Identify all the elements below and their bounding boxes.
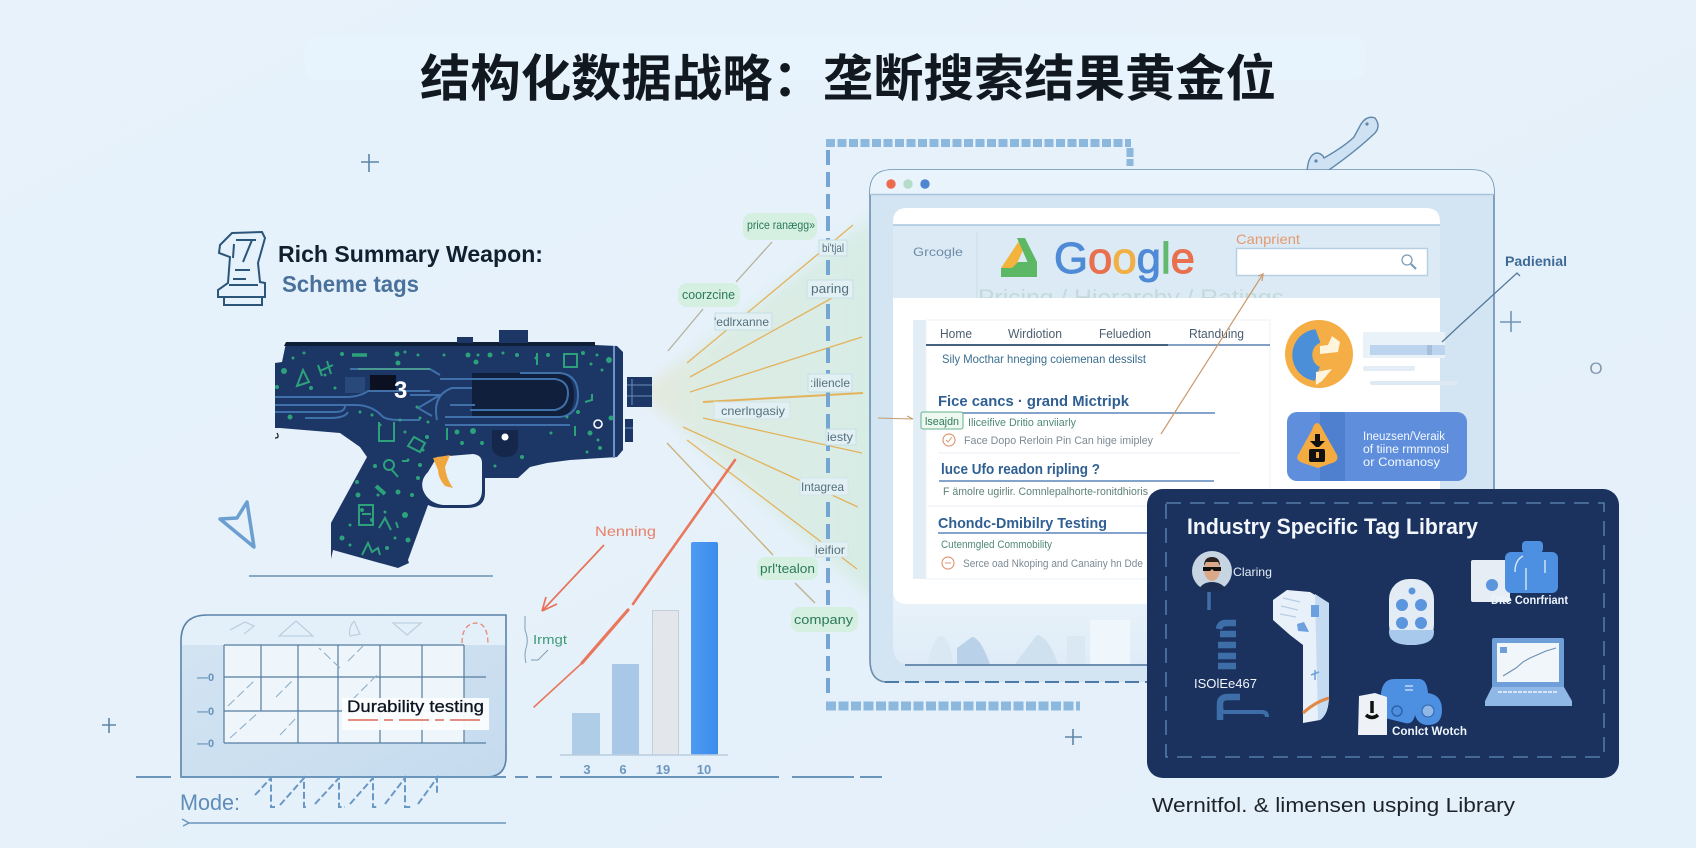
circuit lines (275, 346, 614, 458)
result 1 heading: Fice cancs · grand Mictripk (938, 394, 1130, 410)
label: irmgt with bracket (525, 616, 567, 663)
label: prl'tealon (757, 557, 818, 580)
panel body (181, 615, 506, 777)
dashed data frame (826, 143, 1131, 706)
label: paring (807, 280, 853, 298)
green schema dots (275, 350, 614, 550)
gun body (275, 343, 623, 568)
small google label: Grcogle (913, 245, 963, 259)
table nav: Rtanduing (1189, 327, 1244, 341)
faint mountains (927, 636, 953, 664)
warning text: of tiine rmmnosl (1363, 444, 1449, 456)
green glow cone from muzzle (640, 215, 885, 610)
durability testing label: Durability testing (347, 697, 484, 716)
icon: warning triangle with lock (1297, 423, 1337, 468)
label: company (791, 607, 858, 632)
browser window (870, 170, 1494, 682)
date constraint icon (1471, 541, 1558, 602)
label: edixanne: 'edlrxanne (714, 315, 769, 329)
label: price range (743, 213, 817, 240)
labels on rays (678, 213, 858, 632)
label: iliencle: :iliencle (810, 376, 850, 390)
panel: industry specific tag library (1147, 489, 1619, 778)
search label: Canprient (1236, 231, 1300, 247)
warning text: Ineuzsen/Veraik (1363, 431, 1445, 443)
browser frame outline (870, 170, 1494, 682)
result 2 heading: luce Ufo readon ripling ? (941, 461, 1100, 478)
label: coordine (678, 283, 740, 307)
label: irmgt with bracket: Irmgt (533, 632, 567, 647)
library caption: Wernitfol. & limensen usping Library (1152, 795, 1515, 817)
title: 结构化数据战略：垄断搜索结果黄金位 (420, 39, 1276, 111)
label: coordine: coorzcine (682, 287, 735, 302)
highlight line (358, 368, 430, 370)
sight blocks (457, 330, 528, 343)
warning text (1363, 431, 1449, 469)
chart labels: 19 (656, 762, 670, 777)
title backdrop (305, 36, 1365, 80)
axis ticks (197, 672, 214, 750)
result 3 green subtext: Cutenmgled Commobility (941, 539, 1052, 551)
label: cnerlngasiy (714, 402, 790, 419)
remote icon (1389, 579, 1434, 645)
gun top rail (284, 342, 595, 346)
label: prl'tealon: prl'tealon (760, 561, 815, 576)
google wordmark: Google (1054, 234, 1195, 283)
decorative ring: O (1589, 359, 1603, 378)
padienial pointer line (1442, 273, 1520, 342)
heading line 1: Rich Summary Weapon: (278, 241, 543, 267)
avatar (1192, 551, 1232, 591)
table panel (926, 320, 1270, 579)
green highlight tag (921, 412, 963, 429)
mode arrow line (182, 819, 506, 826)
axis ticks: —0 (197, 672, 214, 684)
warning text: or Comanosy (1363, 457, 1440, 469)
icon: wrench behind browser (1307, 117, 1378, 172)
label: nenning: Nenning (595, 523, 656, 539)
bar 4 (691, 542, 718, 755)
warning panel (1287, 412, 1467, 481)
search page card (893, 208, 1440, 604)
green schema glyph shapes (297, 353, 592, 555)
table nav: Wirdiotion (1008, 327, 1062, 341)
mode row (180, 778, 506, 826)
heading line 2: Scheme tags (282, 271, 419, 297)
bar chart (560, 542, 728, 777)
dark slide (472, 373, 574, 417)
red dashed badge (462, 623, 488, 645)
label: bital: bi'tjal (822, 241, 844, 255)
mode label: Mode: (180, 790, 240, 815)
result 3 text: Serce oad Nkoping and Canainy hn Dde (963, 558, 1143, 570)
contact watch label: Conlct Wotch (1392, 724, 1467, 738)
label: price range: price ranægg» (747, 218, 815, 232)
decorative plus marks (102, 154, 1521, 745)
date constraint label: Dlte Conrfriant (1491, 593, 1568, 607)
panel background (1147, 489, 1619, 778)
bar 1 (572, 713, 600, 755)
arrow to green tag (878, 416, 913, 419)
bar 2 (612, 664, 639, 755)
search box (1236, 248, 1428, 276)
result 2 text: F ämolre ugirlir. Comnlepalhorte-ronitdhioris (943, 486, 1148, 498)
frame left line (826, 150, 830, 698)
zigzag arrows (255, 778, 437, 807)
green highlight tag: lseajdn (925, 416, 959, 428)
browser frame (870, 170, 1494, 682)
result table (913, 320, 1270, 579)
chart labels: 3 (583, 762, 591, 777)
baseline under table and chart (136, 776, 882, 778)
heading: rich summary weapon (278, 241, 543, 297)
white numeral on gun: 3 (394, 377, 407, 404)
result 1 text: Face Dopo Rerloin Pin Can hige imipley (964, 435, 1153, 447)
table sub nav: Sily Mocthar hneging coiemenan dessilst (942, 352, 1147, 366)
panel outline (181, 615, 506, 777)
window buttons (886, 179, 930, 189)
label: iesty: iesty (827, 430, 853, 444)
icon: rich summary weapon outline (218, 232, 265, 305)
grid (224, 645, 486, 743)
knowledge bars (1363, 332, 1458, 385)
iso label: ISOlEe467 (1194, 676, 1257, 691)
browser bottom dashed edge (885, 681, 1150, 683)
grip outline detail (275, 433, 278, 438)
label: company: company (794, 612, 854, 627)
panel header (181, 615, 506, 645)
result 3 heading: Chondc-Dmibilry Testing (938, 515, 1107, 532)
contact watch icon (1358, 679, 1442, 735)
axis ticks: —0 (197, 738, 214, 750)
label: intagrea: Intagrea (801, 480, 844, 494)
handheld scanner icon (1273, 590, 1329, 723)
chart labels: 10 (697, 762, 711, 777)
muzzle blocks (625, 377, 652, 442)
label: padienial: Padienial (1505, 253, 1567, 269)
arrow: nenning to table (542, 545, 604, 611)
comb icon (1218, 623, 1267, 720)
avatar label: Claring (1233, 565, 1272, 579)
lower page area (893, 590, 1440, 665)
browser title bar (870, 170, 1494, 194)
trigger guard opening (422, 454, 482, 505)
laptop icon (1485, 638, 1572, 706)
chart labels: 6 (619, 762, 627, 777)
frame bottom band (826, 702, 1080, 710)
chart labels (583, 762, 711, 777)
table nav: Home (940, 327, 972, 341)
label: cnerlngasiy: cnerlngasiy (721, 404, 785, 418)
durability table panel (181, 615, 506, 777)
page header band (893, 225, 1440, 298)
icon: paper arrow (220, 502, 254, 547)
label: paring: paring (811, 281, 849, 296)
label: ieifior: ieifior (815, 543, 845, 557)
table left strip (913, 320, 926, 579)
grid dashes (228, 646, 378, 738)
thick orange trend line (534, 460, 735, 707)
arrow to search box (1161, 274, 1263, 434)
header icons (230, 621, 421, 636)
gun base line (249, 575, 493, 577)
axis ticks: —0 (197, 706, 214, 718)
panel title: Industry Specific Tag Library (1187, 514, 1479, 539)
frame top band (826, 139, 1131, 147)
screw recess (492, 430, 518, 457)
durability testing label (342, 697, 489, 730)
dashed border (1166, 503, 1604, 757)
table nav (940, 327, 1244, 341)
trigger (433, 455, 453, 488)
chart axis (560, 754, 728, 756)
bar 3 (652, 610, 678, 755)
ray lines from muzzle (667, 225, 863, 603)
faint clipped header text: Pricing / Hierarchy / Ratings (978, 285, 1284, 310)
icon: magnifier (1402, 255, 1416, 269)
schema gun illustration (275, 330, 652, 568)
icon: tricolor logo triangle (1001, 238, 1037, 277)
result 1 green subtext: Iliceifive Dritio anviiarly (968, 417, 1076, 429)
icon: orange knowledge badge (1285, 320, 1353, 388)
table nav: Feluedion (1099, 327, 1151, 341)
